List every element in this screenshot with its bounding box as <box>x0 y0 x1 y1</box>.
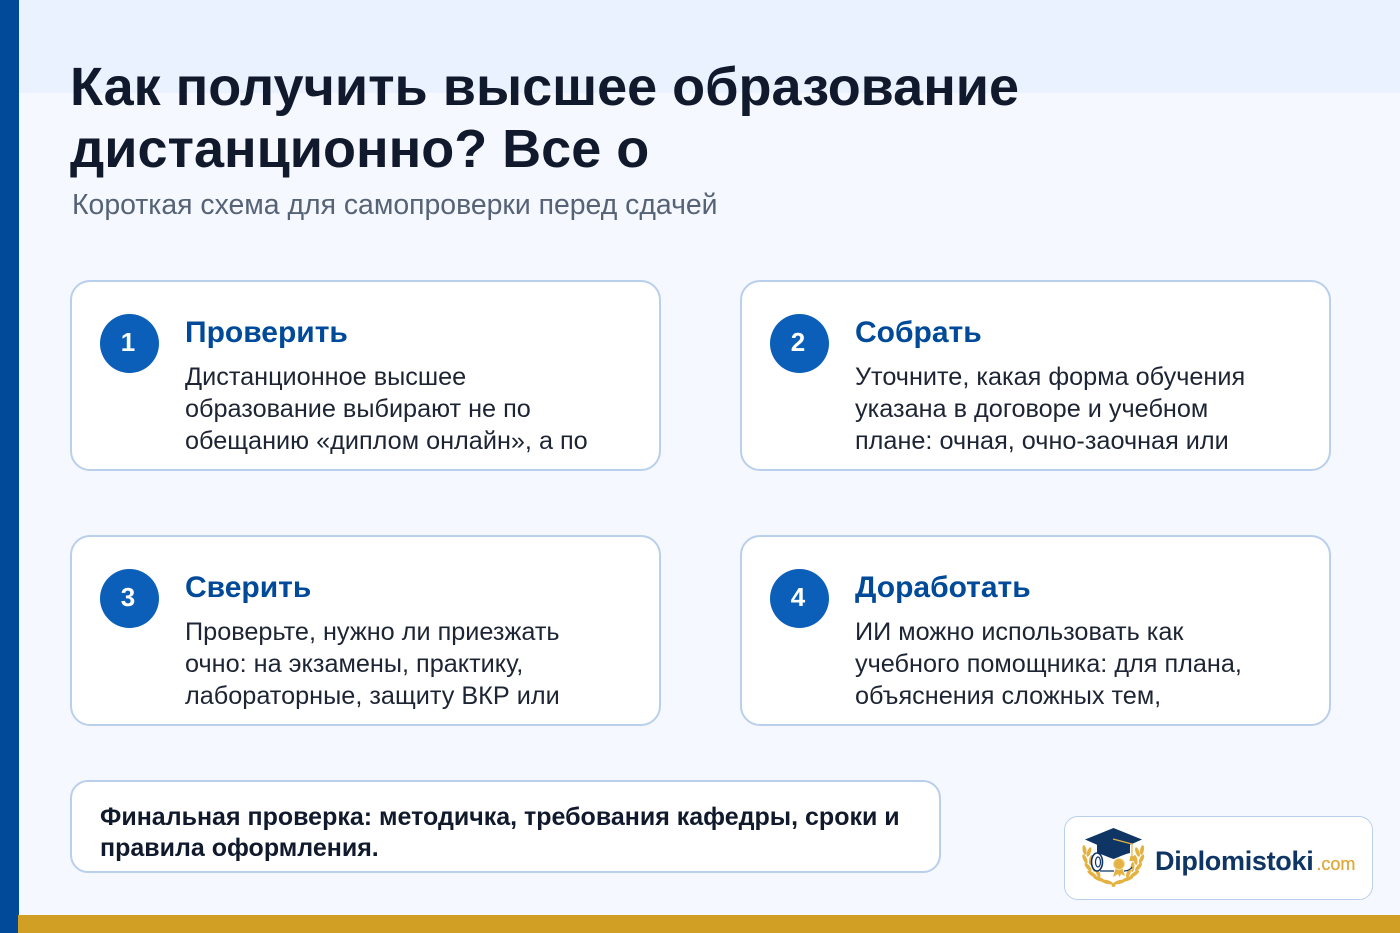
step 1 heading: Проверить <box>185 316 348 349</box>
step 2 text <box>855 363 1245 455</box>
left accent bar <box>0 0 19 933</box>
final check text <box>100 803 900 862</box>
panel: step 2 <box>740 280 1331 471</box>
step 1 number <box>100 314 159 373</box>
step 1 text: Дистанционное высшее <box>185 363 466 391</box>
step 3 text: лабораторные, защиту ВКР или <box>185 682 560 710</box>
step 1 text: обещанию «диплом онлайн», а по <box>185 427 588 455</box>
step 2 text: Уточните, какая форма обучения <box>855 363 1245 391</box>
step 2 text: указана в договоре и учебном <box>855 395 1208 423</box>
step 1 text: образование выбирают не по <box>185 395 531 423</box>
step 4 text: ИИ можно использовать как <box>855 618 1183 646</box>
step 4 text: объяснения сложных тем, <box>855 682 1161 710</box>
step 4 heading: Доработать <box>855 571 1031 604</box>
final check text: правила оформления. <box>100 834 379 862</box>
panel: step 1 <box>70 280 661 471</box>
title: дистанционно? Все о <box>70 119 649 179</box>
top band <box>0 0 1400 93</box>
step 2 number: 2 <box>791 327 805 357</box>
logo wordmark: Diplomistoki.com <box>1155 846 1355 876</box>
step 2 number <box>770 314 829 373</box>
bottom accent bar <box>18 915 1400 933</box>
step 2 heading: Собрать <box>855 316 982 349</box>
subtitle: Короткая схема для самопроверки перед сдачей <box>72 189 718 221</box>
step 3 number: 3 <box>121 582 135 612</box>
step 1 text <box>185 363 588 455</box>
panel: logo <box>1064 816 1373 900</box>
step 1 number: 1 <box>121 327 135 357</box>
step 3 text: Проверьте, нужно ли приезжать <box>185 618 560 646</box>
step 4 number: 4 <box>791 582 805 612</box>
final check text: Финальная проверка: методичка, требования кафедры, сроки и <box>100 803 900 831</box>
title <box>70 57 1019 179</box>
step 4 text: учебного помощника: для плана, <box>855 650 1242 678</box>
panel: step 3 <box>70 535 661 726</box>
step 3 number <box>100 569 159 628</box>
step 4 text <box>855 618 1242 710</box>
step 3 text <box>185 618 560 710</box>
step 3 heading: Сверить <box>185 571 311 604</box>
step 3 text: очно: на экзамены, практику, <box>185 650 523 678</box>
title: Как получить высшее образование <box>70 57 1019 117</box>
step 2 text: плане: очная, очно-заочная или <box>855 427 1229 455</box>
panel: step 4 <box>740 535 1331 726</box>
icon: graduation cap with laurel <box>1082 828 1144 887</box>
panel: final check callout <box>70 780 941 873</box>
step 4 number <box>770 569 829 628</box>
